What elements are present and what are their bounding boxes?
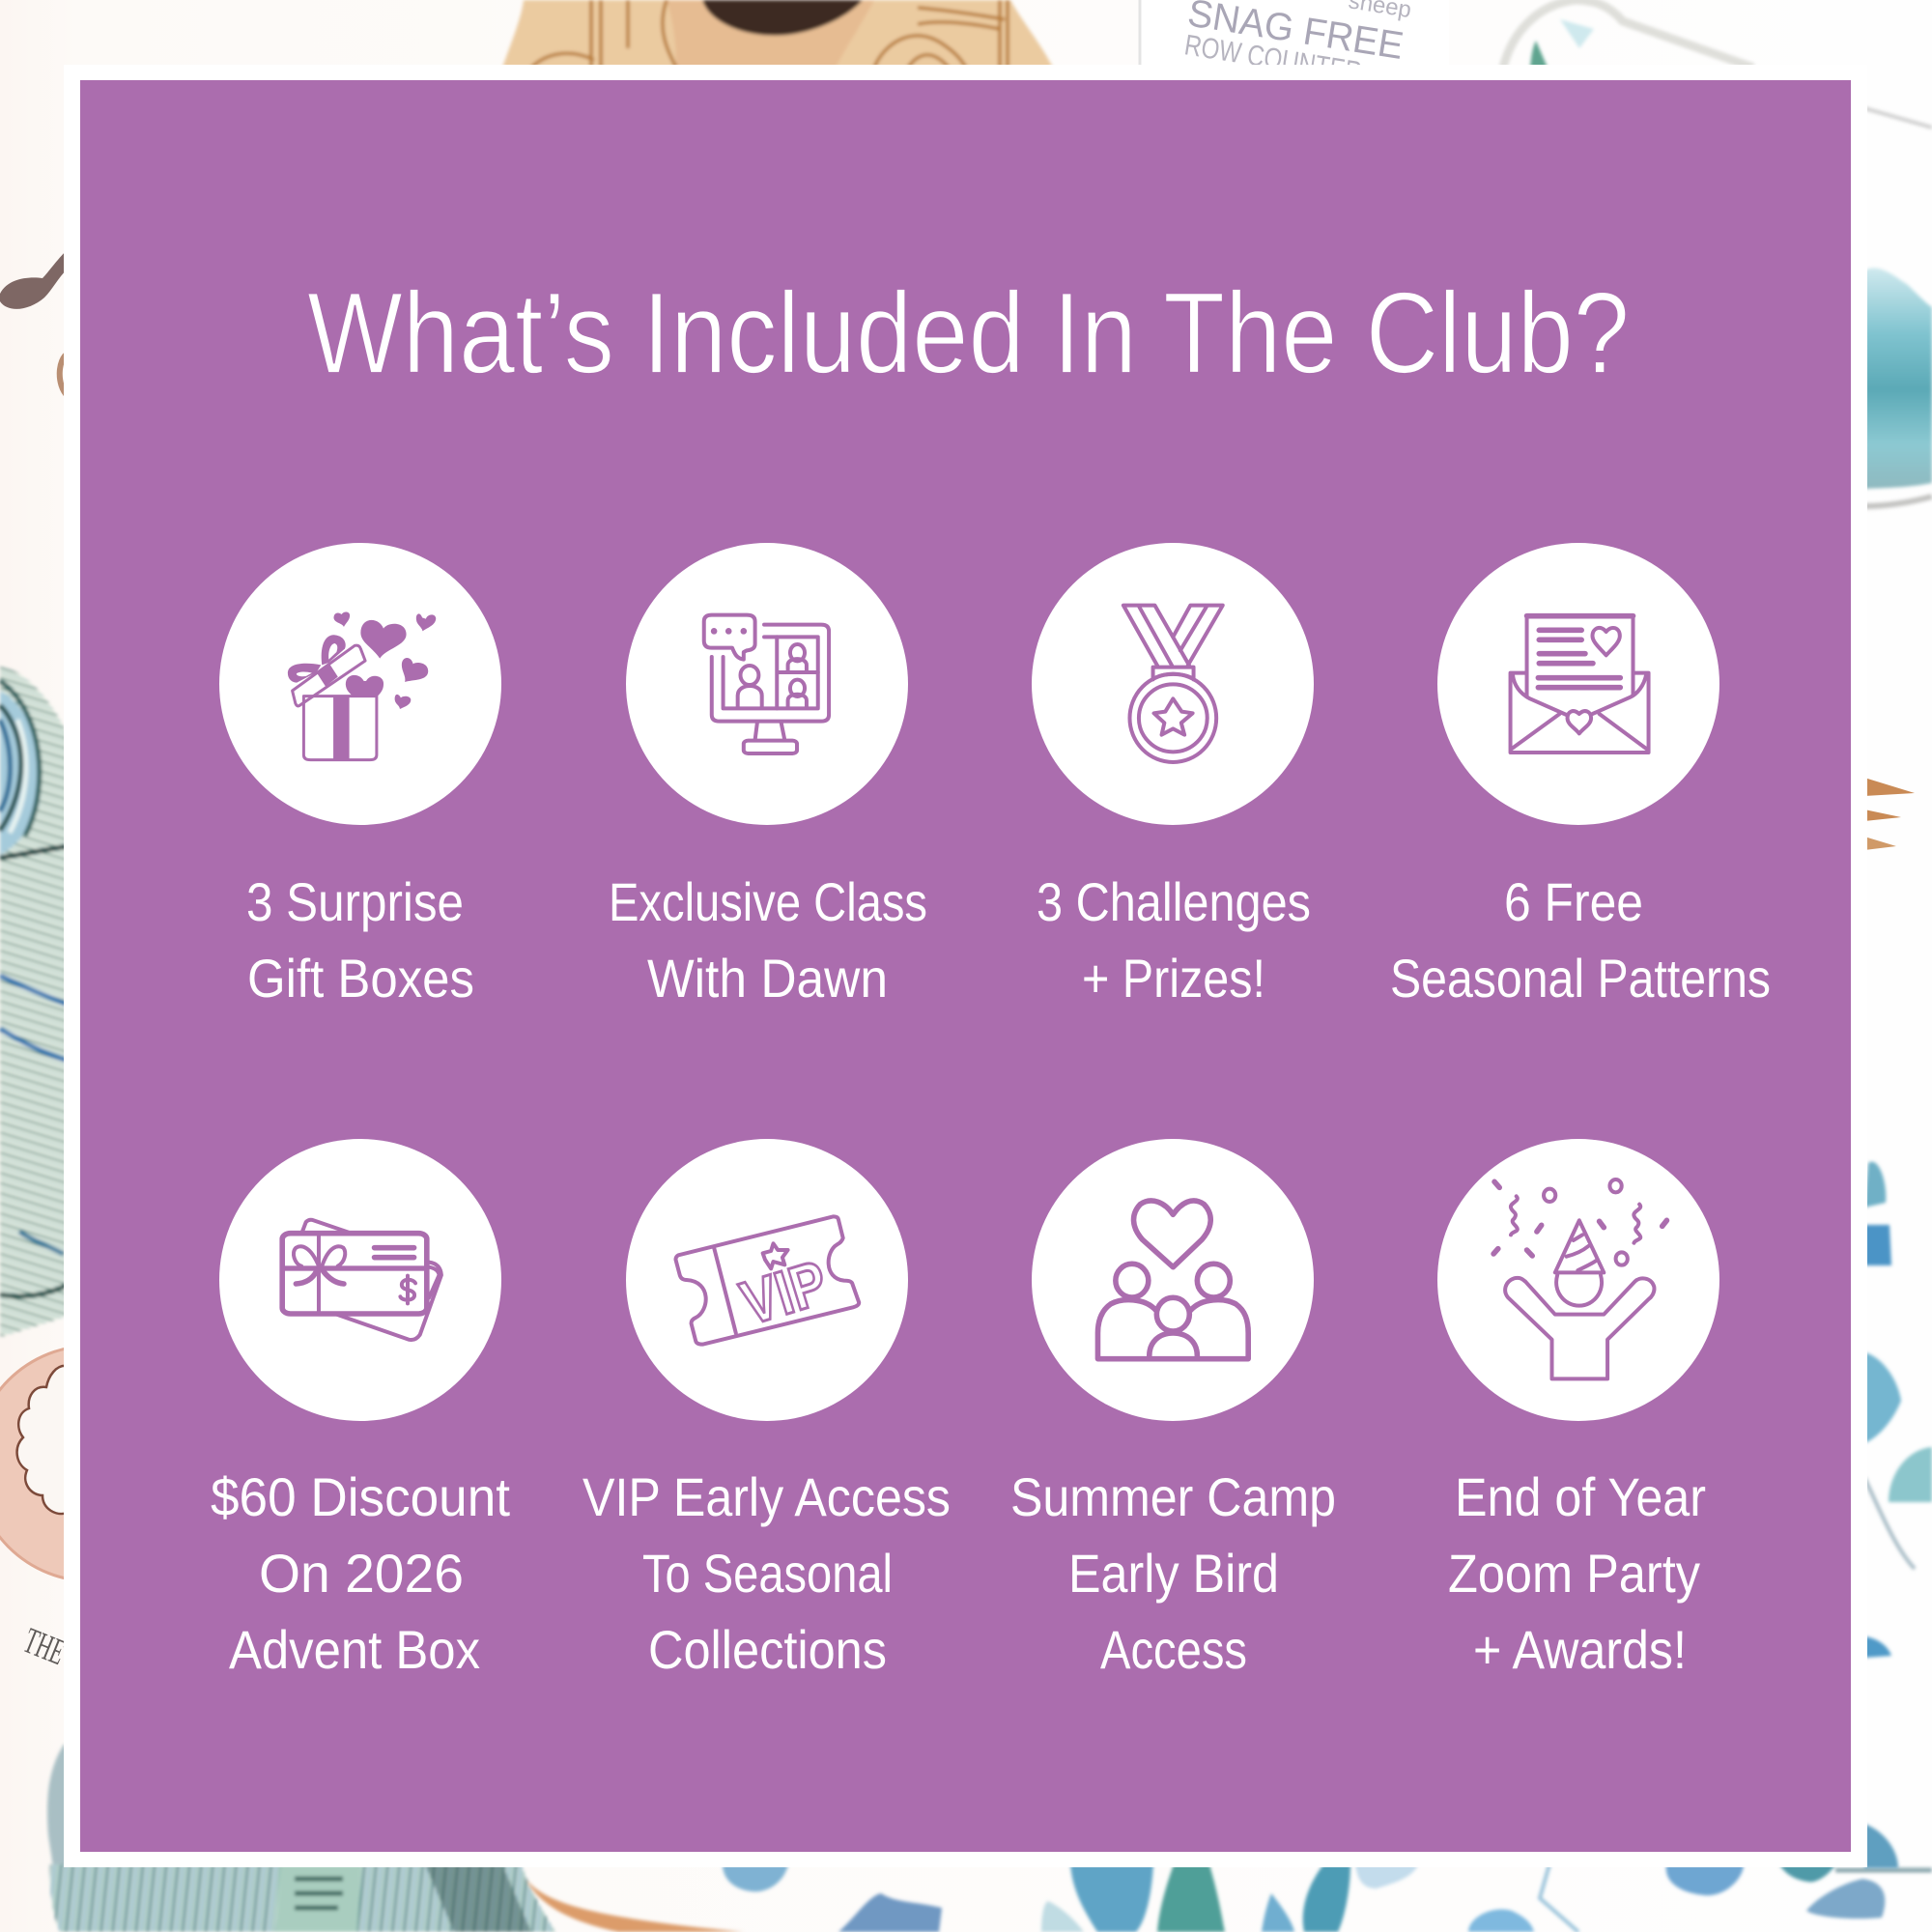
- label: With Dawn: [647, 948, 888, 1009]
- item: summer camp: [1010, 1139, 1336, 1680]
- label: 3 Challenges: [1037, 871, 1311, 932]
- title: What’s Included In The Club?: [307, 269, 1630, 398]
- label: Access: [1100, 1619, 1247, 1680]
- watercolour leaves right: [1864, 1162, 1932, 1868]
- label: 3 Surprise: [246, 871, 464, 932]
- icon: gift box with hearts: [288, 611, 436, 760]
- item: discount: [211, 1139, 510, 1680]
- label: Gift Boxes: [247, 948, 474, 1009]
- wooden spoon shape: [0, 249, 68, 309]
- label: Collections: [648, 1619, 887, 1680]
- snag free row counter card: ROW COUNTER: [1182, 29, 1364, 89]
- label: Seasonal Patterns: [1390, 948, 1771, 1009]
- knitting needles right: [1864, 778, 1915, 850]
- icon: love letter: [1511, 616, 1649, 753]
- snag free row counter card: [1140, 0, 1449, 89]
- circle badge: [1437, 1139, 1719, 1421]
- icon: gift cards: [282, 1220, 441, 1340]
- label: Exclusive Class: [609, 871, 927, 932]
- brown arc: [60, 354, 68, 396]
- item: free seasonal patterns: [1390, 543, 1771, 1009]
- circle badge: [1437, 543, 1719, 825]
- label: On 2026: [259, 1543, 464, 1604]
- circle badge: [219, 543, 501, 825]
- label: Summer Camp: [1010, 1466, 1336, 1527]
- label: + Prizes!: [1082, 948, 1265, 1009]
- label: To Seasonal: [642, 1543, 893, 1604]
- wooden yarn bowl at top: [502, 0, 1053, 68]
- label: Early Bird: [1068, 1543, 1279, 1604]
- sticker badge with sheep: [0, 1346, 210, 1673]
- label: Advent Box: [229, 1619, 480, 1680]
- label: End of Year: [1455, 1466, 1706, 1527]
- skein of yarn left: [0, 667, 68, 1337]
- grey yarn lower left: [47, 1745, 68, 1874]
- icon: vip ticket: [675, 1216, 859, 1345]
- circle badge: [1032, 543, 1314, 825]
- item: challenges: [1032, 543, 1314, 1009]
- item: zoom party: [1437, 1139, 1719, 1680]
- watercolour bowl right: [1864, 108, 1932, 506]
- icon: video call monitor: [704, 615, 829, 753]
- glass counter shape: [1503, 0, 1753, 68]
- icon: family with heart: [1097, 1201, 1248, 1359]
- watercolour leaves bottom: [723, 1864, 1932, 1932]
- icon: party person with confetti: [1493, 1179, 1666, 1378]
- icon: vip ticket: VIP: [733, 1247, 835, 1338]
- orange bowl rim: [526, 1879, 744, 1932]
- label: $60 Discount: [211, 1466, 510, 1527]
- label: Zoom Party: [1448, 1543, 1700, 1604]
- yarn at bottom: [49, 1864, 555, 1932]
- item: exclusive class: [609, 543, 927, 1009]
- circle badge: [219, 1139, 501, 1421]
- circle badge: [1032, 1139, 1314, 1421]
- circle badge: [626, 1139, 908, 1421]
- icon: medal: [1123, 606, 1223, 762]
- label: VIP Early Access: [582, 1466, 951, 1527]
- label: + Awards!: [1473, 1619, 1687, 1680]
- item: 3 surprise gift boxes: [219, 543, 501, 1009]
- sticker badge with sheep: THE: [18, 1620, 71, 1673]
- label: 6 Free: [1504, 871, 1643, 932]
- item: vip early access: [582, 1139, 951, 1680]
- circle badge: [626, 543, 908, 825]
